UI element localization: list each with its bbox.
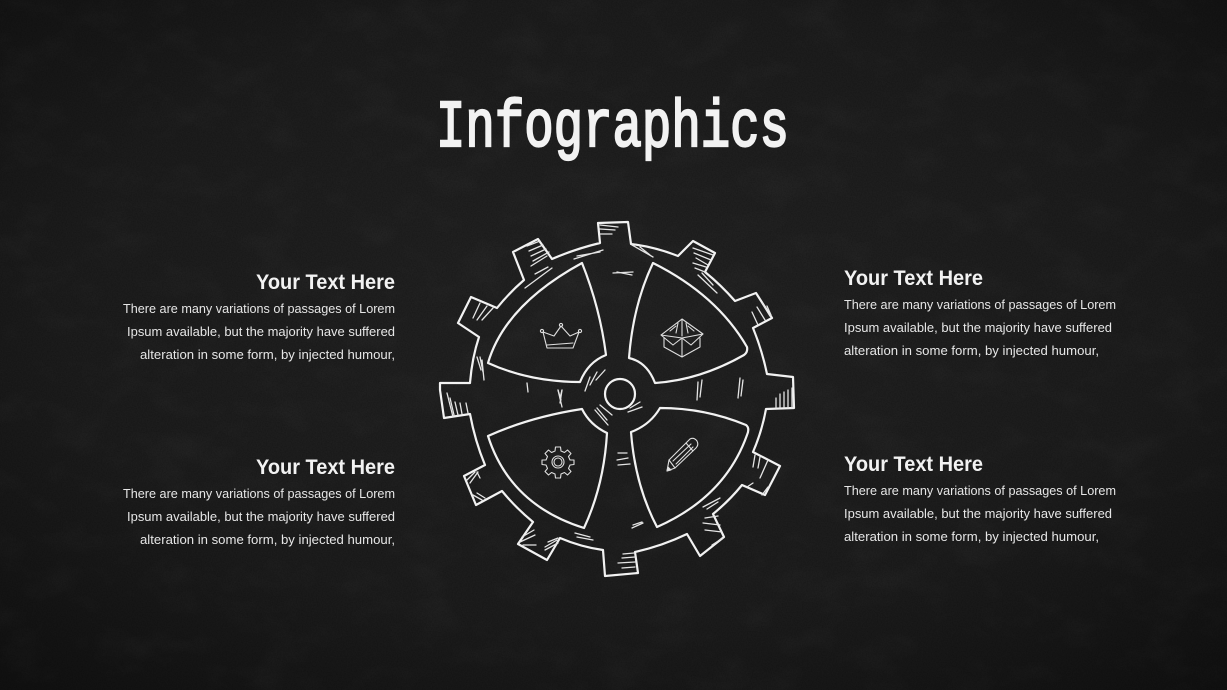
text block: lower left <box>123 456 395 547</box>
text block: upper right <box>844 267 1116 358</box>
body: lower left <box>123 486 395 547</box>
icon: open box <box>661 319 703 357</box>
body: upper left <box>123 301 395 362</box>
body: upper left: There are many variations of passages of Lorem <box>123 301 395 316</box>
body: lower left: Ipsum available, but the majority have suffered <box>127 509 395 524</box>
icon: crown <box>540 323 582 348</box>
chalk hatching <box>447 225 792 568</box>
icon: pencil <box>667 438 698 471</box>
center hub <box>605 379 635 409</box>
text block: lower right <box>844 453 1116 544</box>
body: lower left: There are many variations of passages of Lorem <box>123 486 395 501</box>
blade: bottom left <box>488 409 607 528</box>
heading: upper right: Your Text Here <box>844 267 983 290</box>
body: lower right: Ipsum available, but the majority have suffered <box>844 506 1112 521</box>
body: upper right <box>844 297 1116 358</box>
heading: lower left: Your Text Here <box>256 456 395 479</box>
blade: top left <box>488 263 606 382</box>
blade: top right <box>629 263 747 383</box>
title: Infographics <box>436 91 789 167</box>
heading: upper left: Your Text Here <box>256 271 395 294</box>
body: upper left: Ipsum available, but the majority have suffered <box>127 324 395 339</box>
body: upper left: alteration in some form, by injected humour, <box>140 347 395 362</box>
gear outline <box>440 222 794 576</box>
body: upper right: Ipsum available, but the majority have suffered <box>844 320 1112 335</box>
body: lower right <box>844 483 1116 544</box>
body: upper right: alteration in some form, by injected humour, <box>844 343 1099 358</box>
icon: cog <box>542 447 574 478</box>
heading: lower right: Your Text Here <box>844 453 983 476</box>
body: upper right: There are many variations of passages of Lorem <box>844 297 1116 312</box>
body: lower right: There are many variations of passages of Lorem <box>844 483 1116 498</box>
text block: upper left <box>123 271 395 362</box>
gear diagram <box>440 222 794 576</box>
body: lower right: alteration in some form, by injected humour, <box>844 529 1099 544</box>
body: lower left: alteration in some form, by injected humour, <box>140 532 395 547</box>
blade: bottom right <box>631 408 748 527</box>
